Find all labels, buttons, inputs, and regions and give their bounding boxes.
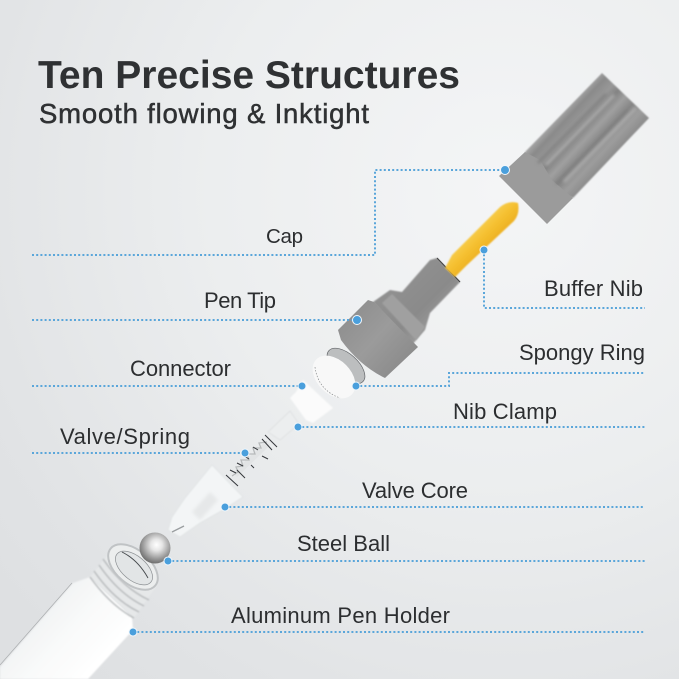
- callout: spongy ring: [352, 340, 645, 390]
- callout: valve core: [221, 478, 645, 511]
- callout: valve/spring: Valve/Spring: [60, 424, 190, 449]
- callout: aluminum pen holder: Aluminum Pen Holder: [231, 603, 450, 628]
- callout: buffer nib: Buffer Nib: [544, 276, 643, 301]
- part: pen tip: [338, 258, 460, 378]
- callout: nib clamp: Nib Clamp: [453, 399, 557, 424]
- part: nib clamp: [268, 411, 299, 440]
- callout: valve core: Valve Core: [362, 478, 468, 503]
- part: valve core: [168, 465, 243, 537]
- title: Ten Precise Structures: [38, 54, 460, 97]
- callout: spongy ring: Spongy Ring: [519, 340, 645, 365]
- part: connector: [290, 380, 333, 423]
- part: valve spring: [226, 435, 277, 486]
- callout: aluminum pen holder: [129, 603, 645, 636]
- callout: connector: [32, 356, 306, 390]
- part: steel ball: [140, 532, 170, 564]
- part: cap: [499, 73, 649, 224]
- callout: pen tip: [32, 288, 362, 324]
- callout: steel ball: [164, 531, 645, 565]
- callout: buffer nib: [480, 246, 645, 308]
- part: aluminum pen holder: [0, 535, 166, 679]
- callout: cap: Cap: [266, 225, 303, 248]
- callout: connector: Connector: [130, 356, 231, 381]
- part: buffer nib: [445, 202, 518, 277]
- callout: valve/spring: [32, 424, 249, 457]
- subtitle: Smooth flowing & Inktight: [39, 98, 369, 129]
- callout: pen tip: Pen Tip: [204, 288, 276, 313]
- part: spongy ring: [304, 342, 371, 407]
- callout: cap: [32, 166, 510, 255]
- callout: nib clamp: [294, 399, 645, 431]
- callout: steel ball: Steel Ball: [297, 531, 390, 556]
